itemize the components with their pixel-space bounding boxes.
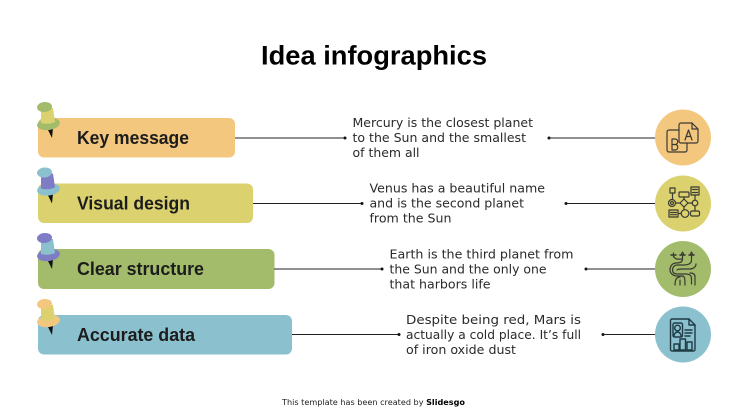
description: Mercury	[352, 116, 533, 160]
label bar: Accurate data	[38, 315, 292, 354]
label bar: Clear structure: Clear structure	[77, 259, 204, 279]
description: Earth: that harbors life	[390, 278, 490, 292]
connector line left	[274, 268, 384, 270]
description: Venus	[370, 182, 545, 226]
icon: A and B documents	[655, 110, 711, 166]
connector line right	[602, 333, 655, 336]
label bar: Visual design: Visual design	[77, 194, 190, 214]
connector line right	[564, 202, 655, 205]
connector line left	[235, 136, 346, 140]
icon: flowchart	[655, 176, 711, 232]
row: Accurate data	[36, 298, 711, 362]
row: Visual design	[36, 167, 711, 232]
connector line right	[548, 136, 655, 140]
description: Venus: and is the second planet	[370, 196, 524, 210]
description: Mercury: to the Sun and the smallest	[352, 131, 526, 145]
icon: winding paths with arrows	[655, 241, 711, 297]
description: Mars	[406, 313, 581, 357]
label bar: Key message: Key message	[77, 128, 189, 148]
label bar: Key message	[38, 118, 235, 158]
connector line right	[584, 268, 655, 270]
label bar: Clear structure	[38, 249, 274, 289]
icon: push pin orange and yellow	[36, 298, 61, 335]
label bar: Accurate data: Accurate data	[77, 325, 196, 345]
description: Mercury: of them all	[352, 146, 420, 160]
icon: push pin blue and purple	[36, 167, 61, 204]
description: Earth	[390, 248, 574, 292]
description: Mars: Despite being red, Mars is	[406, 313, 581, 327]
description: Venus: Venus has a beautiful name	[370, 182, 545, 196]
title: Idea infographics	[261, 40, 487, 70]
icon: push pin green and yellow	[36, 101, 61, 138]
icon: push pin purple and blue	[36, 232, 61, 269]
description: Earth: Earth is the third planet from	[390, 248, 574, 262]
description: Mercury: Mercury is the closest planet	[352, 116, 533, 130]
description: Mars: of iron oxide dust	[406, 343, 516, 357]
description: Venus: from the Sun	[370, 212, 452, 226]
label bar: Visual design	[38, 184, 253, 223]
footer credit: This template has been created by Slidesgo	[281, 398, 466, 407]
row: Clear structure	[36, 232, 711, 297]
connector line left	[292, 333, 400, 336]
row: Key message	[36, 101, 711, 166]
description: Earth: the Sun and the only one	[390, 262, 546, 276]
icon: data report document	[655, 306, 711, 362]
connector line left	[253, 202, 364, 205]
description: Mars: actually a cold place. It’s full	[406, 328, 581, 342]
